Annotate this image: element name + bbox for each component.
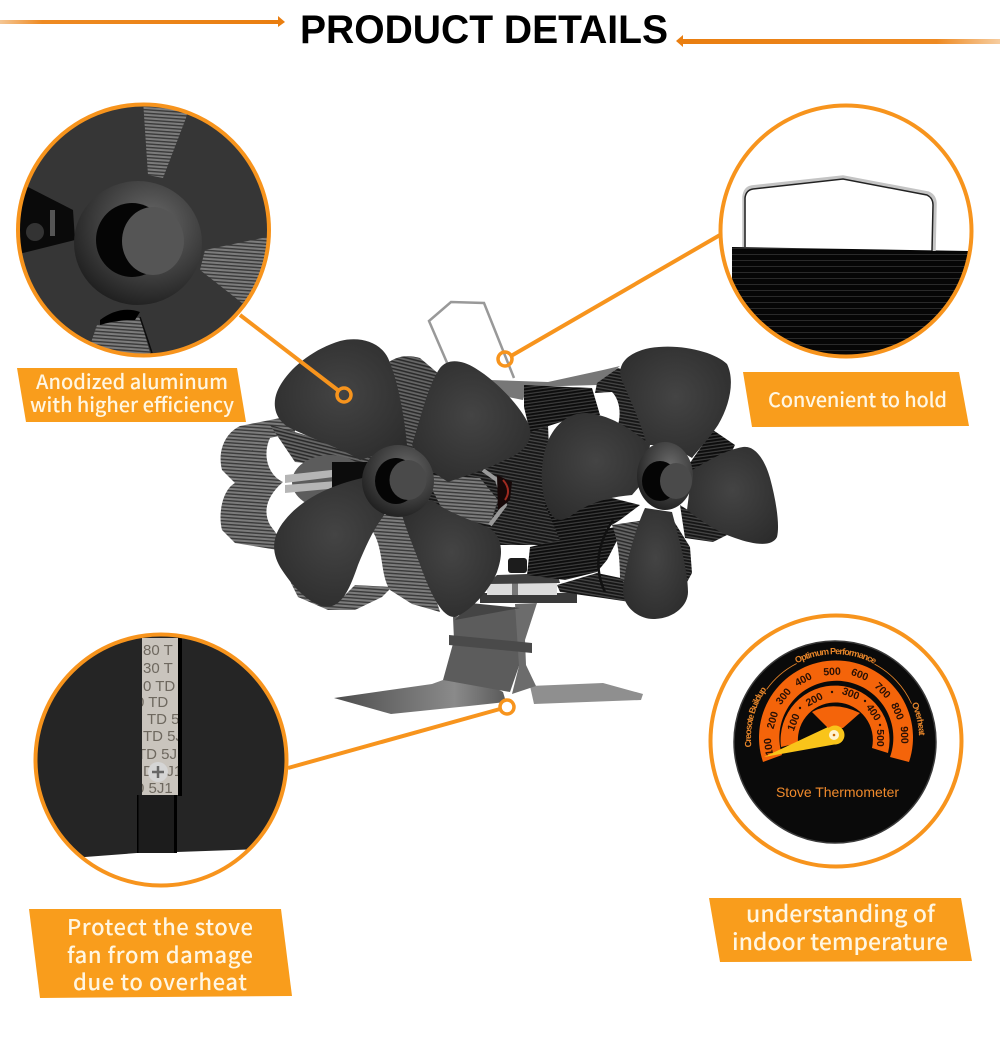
arc labels (744, 648, 925, 747)
ring (36, 634, 286, 886)
left fan blades (274, 339, 530, 617)
inner scale: 300 (840, 685, 861, 703)
outer scale: 100 (762, 737, 776, 756)
outer scale: 300 (774, 686, 794, 707)
ring (18, 104, 269, 356)
outer scale: 400 (793, 670, 814, 689)
leader dot: aluminum (337, 388, 351, 402)
leader line: overheat protection (288, 709, 500, 768)
panel: thermal cutoff detail circle: 0 5J1 (136, 780, 173, 797)
outer scale (762, 666, 910, 756)
right fan blades (542, 347, 778, 619)
banner: overheat protection: Protect the stove (67, 910, 253, 942)
arc labels: Optimum Performance (795, 648, 876, 664)
banner: temperature: understanding of (746, 895, 936, 929)
right header arrow (676, 35, 1000, 47)
lower right fins (545, 495, 640, 545)
panel: thermal cutoff detail circle: 80 T (143, 642, 173, 659)
leader line: handle (511, 235, 720, 356)
banner: overheat protection (29, 909, 292, 998)
leader line: aluminum (240, 315, 339, 391)
banner: aluminum (17, 366, 246, 422)
arc labels: Overheat (912, 702, 925, 736)
outer scale: 600 (849, 666, 870, 684)
panel: thermal cutoff detail circle: D 5J1 (143, 763, 182, 780)
banner: aluminum: with higher efficiency (30, 389, 234, 418)
handle (429, 302, 514, 378)
panel: thermal cutoff detail circle: 0 TD (143, 678, 175, 695)
banner: overheat protection: due to overheat (73, 965, 247, 997)
thermometer dial (733, 640, 937, 844)
panel: thermal cutoff detail circle: TD 5J (143, 728, 183, 745)
outer scale: 700 (872, 680, 893, 701)
top plate and block (490, 366, 620, 400)
right fan hub (637, 442, 693, 510)
inner scale: 500 (874, 729, 886, 747)
outer scale: 500 (823, 666, 841, 678)
ring (720, 106, 972, 356)
inner scale: 200 (804, 690, 825, 709)
product: twin stove fan (221, 302, 778, 714)
inner scale: 400 (863, 702, 883, 723)
central block (420, 425, 590, 545)
panel: thermal cutoff detail circle: 0 TD (136, 694, 168, 711)
left lobes (221, 415, 295, 552)
title: PRODUCT DETAILS (300, 8, 668, 52)
panel: hub detail circle (15, 100, 275, 360)
inner scale: 100 (785, 712, 803, 733)
panel: thermometer circle (708, 614, 964, 868)
arc labels: Creosote Buildup (744, 688, 766, 747)
stand (334, 558, 643, 714)
panel: thermal cutoff detail circle (30, 630, 290, 886)
outer scale: 800 (888, 701, 906, 722)
left fan hub (362, 445, 434, 517)
outer scale: 900 (898, 726, 910, 744)
left header arrow (0, 16, 285, 27)
banner: temperature (709, 895, 972, 962)
banner: overheat protection: fan from damage (67, 938, 253, 970)
thermometer dial: Stove Thermometer (776, 784, 899, 800)
panel: thermal cutoff detail circle: TD 5 (147, 711, 180, 728)
banner: aluminum: Anodized aluminum (36, 366, 228, 395)
inner scale (785, 685, 886, 747)
leader dot: overheat protection (500, 700, 514, 714)
banner: handle (743, 372, 969, 427)
panel: thermal cutoff detail circle: TD 5J (137, 746, 177, 763)
fin block (221, 356, 735, 612)
top lobe (385, 356, 440, 450)
banner: temperature: indoor temperature (732, 923, 948, 957)
leader dot: handle (498, 352, 512, 366)
outer scale: 200 (765, 710, 781, 730)
needle (764, 726, 844, 757)
panel: handle detail circle (720, 106, 972, 365)
lower lobes (277, 555, 392, 610)
banner: handle: Convenient to hold (768, 384, 947, 413)
panel: thermal cutoff detail circle: 30 T (143, 660, 173, 677)
